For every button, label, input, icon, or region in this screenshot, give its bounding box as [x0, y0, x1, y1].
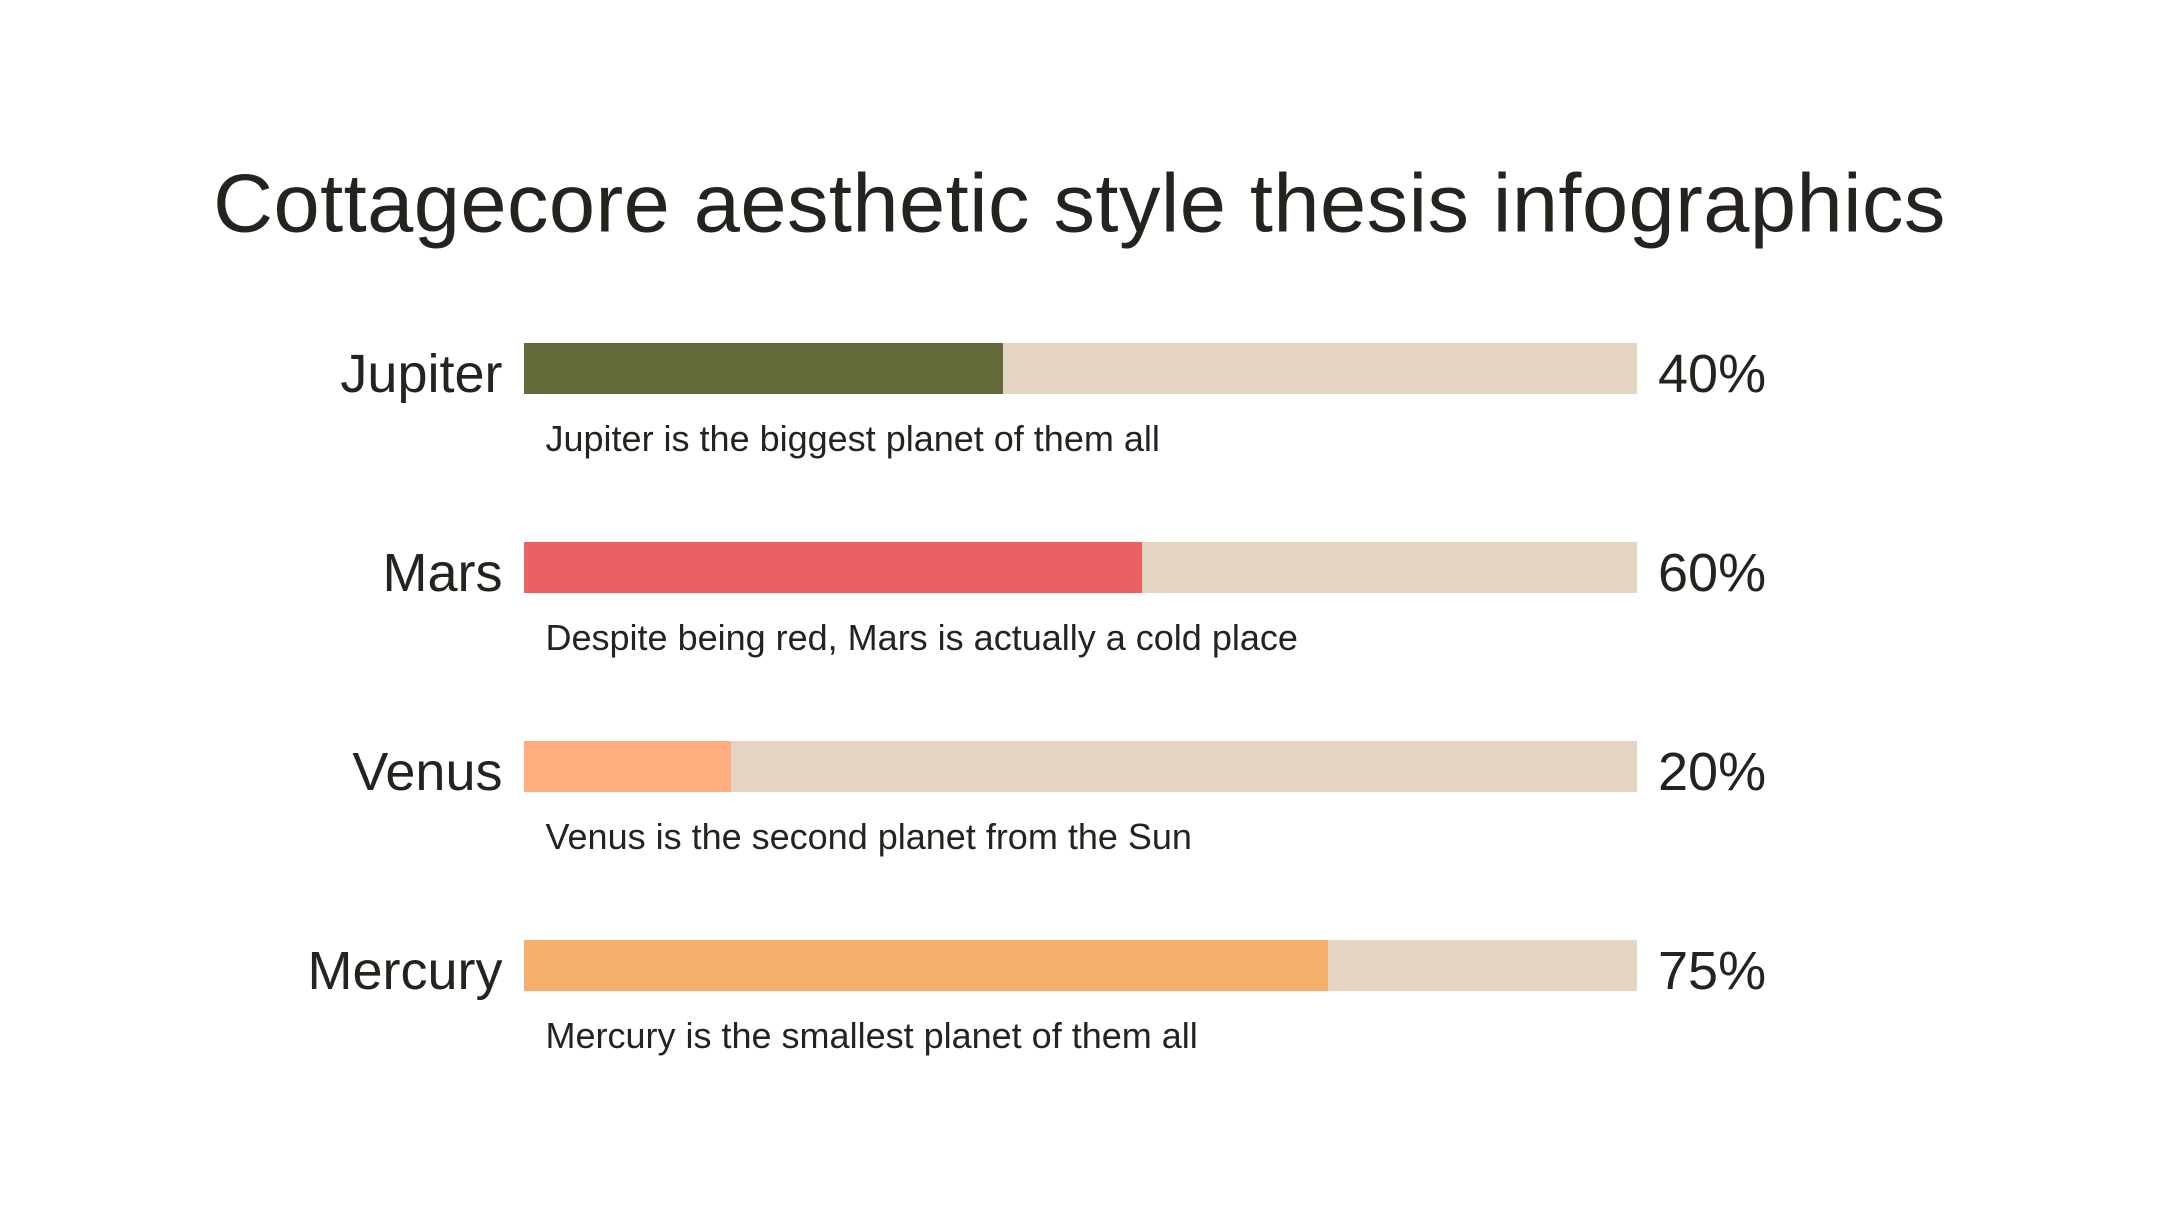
value: Venus 20%: 20%: [1658, 742, 1766, 802]
title: Cottagecore aesthetic style thesis infographics: [213, 156, 1946, 250]
bar fill: Mercury 75%: [524, 940, 1328, 991]
bar fill: Mars 60%: [524, 542, 1142, 593]
value: Mars 60%: 60%: [1658, 543, 1766, 603]
row: Jupiter: [340, 343, 1766, 459]
description: Mercury: Mercury is the smallest planet of them all: [546, 1015, 1198, 1056]
bar track: Mars: [524, 542, 1637, 593]
row: Mars: [382, 542, 1766, 658]
label: Mars: Mars: [382, 543, 502, 603]
description: Venus: Venus is the second planet from the Sun: [546, 816, 1192, 857]
bar track: Jupiter: [524, 343, 1637, 394]
label: Venus: Venus: [352, 742, 502, 802]
description: Mars: Despite being red, Mars is actually a cold place: [546, 617, 1298, 658]
row: Venus: [352, 741, 1766, 857]
label: Jupiter: Jupiter: [340, 344, 503, 404]
value: Jupiter 40%: 40%: [1658, 344, 1766, 404]
description: Jupiter: Jupiter is the biggest planet of them all: [546, 418, 1160, 459]
bar track: Venus: [524, 741, 1637, 792]
bar fill: Venus 20%: [524, 741, 731, 792]
label: Mercury: Mercury: [307, 941, 502, 1001]
value: Mercury 75%: 75%: [1658, 941, 1766, 1001]
bar fill: Jupiter 40%: [524, 343, 1003, 394]
bar track: Mercury: [524, 940, 1637, 991]
row: Mercury: [307, 940, 1766, 1056]
